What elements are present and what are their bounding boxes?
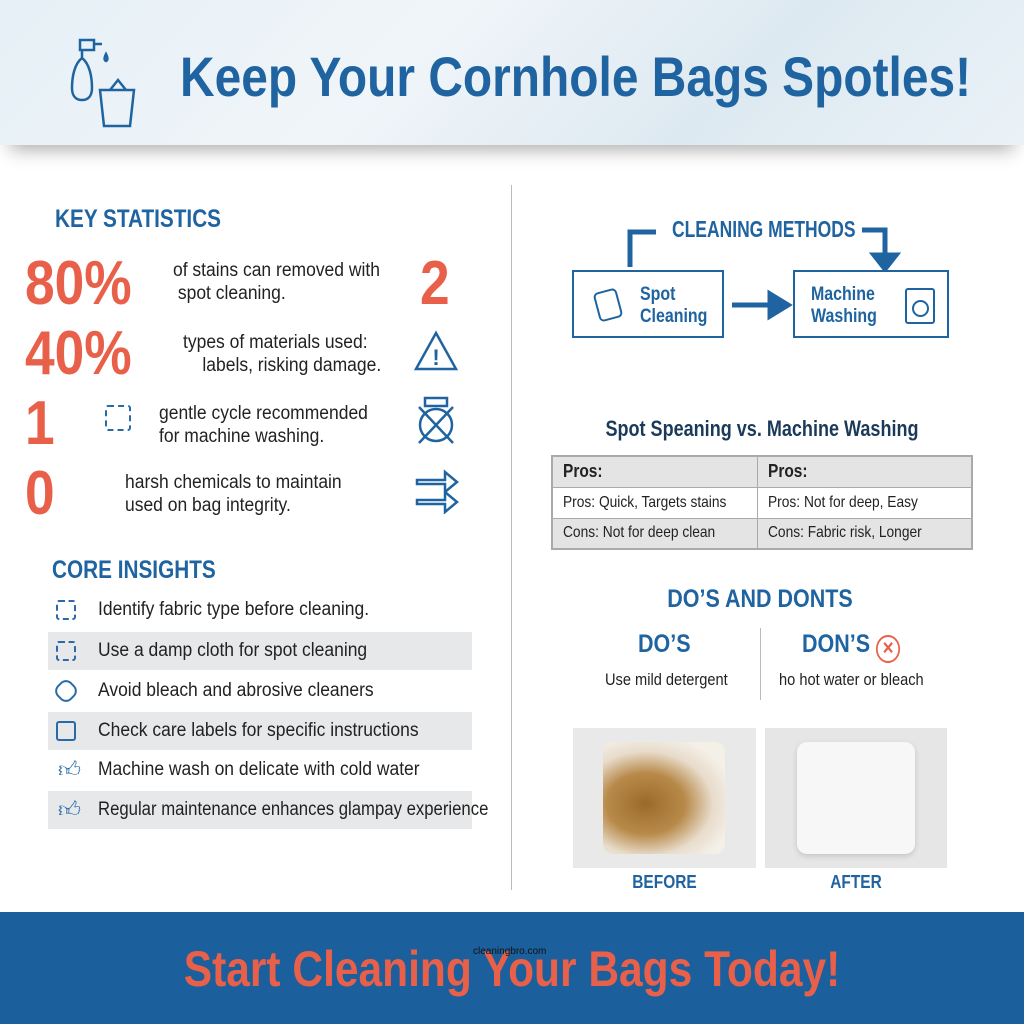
dos and donts: DON’S [802, 630, 870, 658]
dos and donts: DO’S [638, 630, 691, 658]
icon: warning [414, 330, 458, 370]
comparison table: Cons: Not for deep clean [563, 524, 715, 541]
box: spot cleaning: Spot [640, 284, 675, 305]
stat rows: gentle cycle recommended [159, 403, 368, 424]
stat rows [25, 249, 459, 528]
text: BEFORE [632, 872, 697, 892]
box: spot cleaning [572, 270, 724, 338]
footer [0, 912, 1024, 1024]
insights list: Identify fabric type before cleaning. [98, 599, 369, 620]
stat rows: types of materials used: [183, 332, 368, 353]
insights list: Regular maintenance enhances glampay experience [98, 799, 488, 820]
dos and donts: ho hot water or bleach [779, 670, 924, 689]
title: Keep Your Cornhole Bags Spotles! [180, 45, 971, 108]
image: before [573, 728, 756, 868]
comparison table: Pros: [768, 461, 807, 481]
dos and donts: DO’S AND DONTS [667, 585, 853, 613]
heading: core insights: CORE INSIGHTS [52, 556, 216, 584]
icon: warning: ! [432, 345, 440, 370]
stat rows: of stains can removed with [173, 260, 380, 281]
table title: Spot Speaning vs. Machine Washing [605, 416, 919, 441]
comparison table [551, 455, 973, 550]
insights list: 👍︎ [58, 797, 81, 822]
icon: spray bottle and bag [70, 38, 136, 128]
header band [0, 0, 1024, 145]
text: AFTER [830, 872, 882, 892]
stat rows: 40% [25, 319, 132, 388]
box: machine washing: Machine [811, 284, 875, 305]
box: machine washing [793, 270, 949, 338]
stat rows: 2 [420, 249, 450, 318]
insights list: Check care labels for specific instructions [98, 720, 419, 741]
footer: cleaningbro.com [473, 946, 546, 957]
stat rows: 80% [25, 249, 132, 318]
footer: Start Cleaning Your Bags Today! [184, 941, 840, 997]
stat rows: 0 [25, 459, 55, 528]
cleaning methods diagram [572, 216, 949, 338]
comparison table: Pros: Not for deep, Easy [768, 494, 917, 510]
stat rows: labels, risking damage. [202, 355, 381, 376]
cleaning methods diagram: CLEANING METHODS [672, 216, 856, 242]
heading: key statistics: KEY STATISTICS [55, 205, 221, 233]
insights list: Avoid bleach and abrosive cleaners [98, 680, 374, 701]
comparison table: Cons: Fabric risk, Longer [768, 524, 921, 541]
box: machine washing: Washing [811, 306, 877, 327]
stat rows: harsh chemicals to maintain [125, 472, 342, 493]
box: spot cleaning: Cleaning [640, 306, 707, 327]
insights list: Machine wash on delicate with cold water [98, 759, 420, 780]
insights list [48, 599, 488, 829]
comparison table: Pros: [563, 461, 603, 481]
stat rows: for machine washing. [159, 426, 324, 447]
divider [511, 185, 512, 890]
insights list: 👍︎ [58, 757, 81, 782]
stat rows: spot cleaning. [178, 283, 286, 304]
dos and donts: Use mild detergent [605, 670, 728, 689]
stat rows: 1 [25, 389, 55, 458]
stat rows: used on bag integrity. [125, 495, 291, 516]
dos and donts: × [883, 635, 894, 660]
icon: no wash [418, 396, 454, 444]
comparison table: Pros: Quick, Targets stains [563, 494, 726, 510]
image: after [765, 728, 947, 868]
icon: arrows [416, 470, 459, 514]
dos and donts [605, 585, 924, 700]
insights list: Use a damp cloth for spot cleaning [98, 640, 367, 661]
